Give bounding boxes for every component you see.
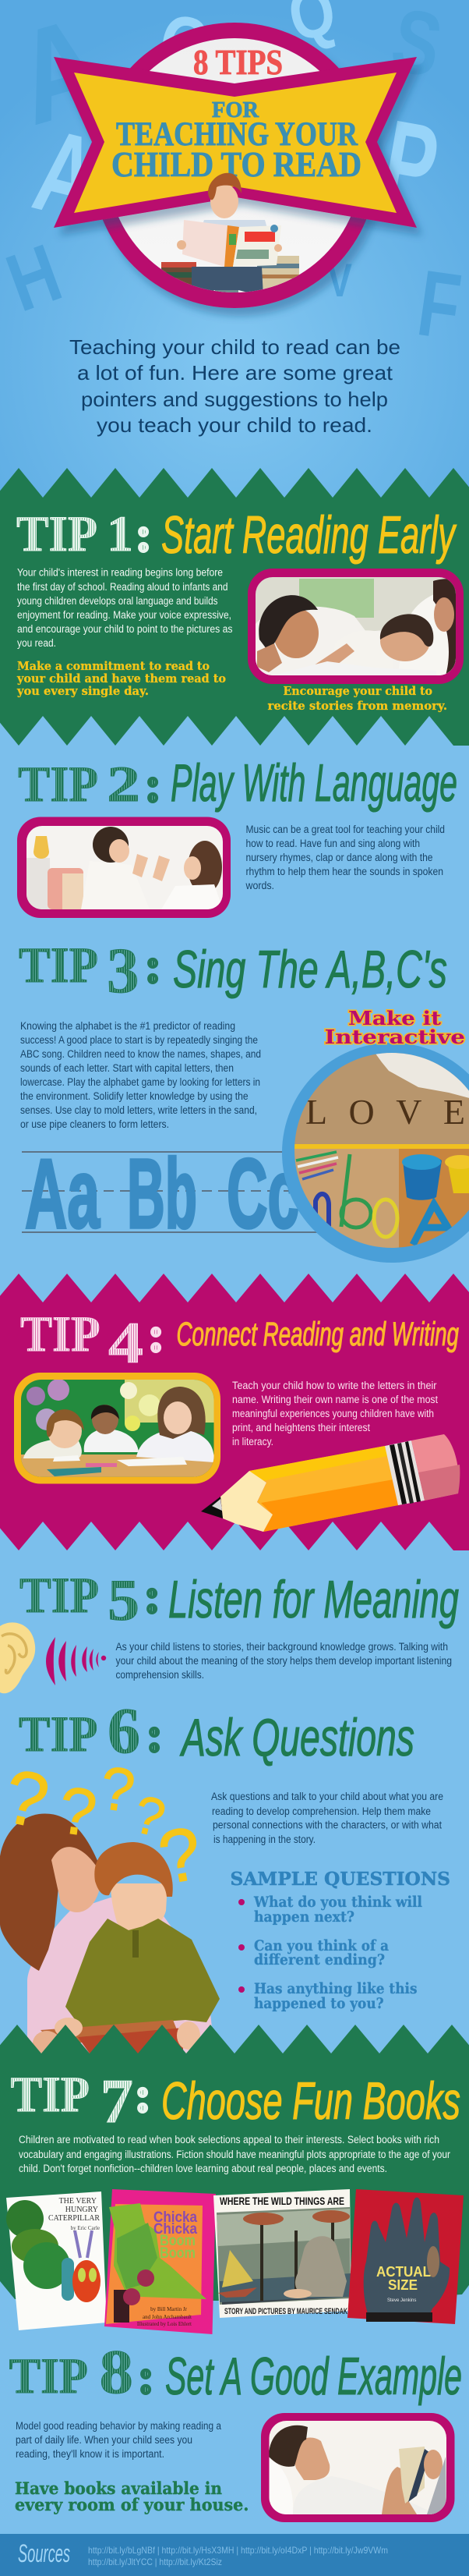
- panel: tip 3: [19, 934, 469, 1263]
- decorative alphabet letters: [0, 0, 467, 360]
- book: the very hungry caterpillar: by Eric Carle: [71, 2225, 100, 2231]
- photo circle: interactive letters: [282, 1043, 469, 1263]
- panel: tip 1: [0, 468, 469, 746]
- book: chicka chicka boom boom: Illustrated by Lois Ehlert: [137, 2321, 192, 2327]
- intro text: Teaching your child to read can be: [69, 335, 400, 359]
- heading: tip 7: :: [135, 2069, 151, 2122]
- heading: tip 6: :: [146, 1709, 163, 1762]
- decorative alphabet letters: V: [327, 254, 352, 306]
- body text: meaningful experiences young children have with: [232, 1408, 434, 1419]
- body text: [232, 1380, 438, 1447]
- body text: senses. Use clay to mold letters, write letters in the sand,: [20, 1104, 257, 1116]
- heading: tip 1: TIP: [16, 506, 97, 562]
- body text: Teach your child how to write the letters in their: [232, 1380, 437, 1391]
- badge ribbon yellow: [74, 73, 397, 213]
- callout: commitment: [16, 659, 226, 698]
- question lines: Has anything like this: [254, 1980, 418, 1997]
- heading: tip 6: 6: [108, 1695, 140, 1767]
- body text: [16, 2420, 221, 2460]
- boy reading on books: [161, 173, 299, 296]
- icon: ear: [0, 1622, 35, 1693]
- heading: tip 5: [19, 1568, 160, 1633]
- heading: tip 6: [19, 1695, 163, 1767]
- body text: lowercase. Play the alphabet game by looking for letters in: [20, 1076, 260, 1088]
- book: the very hungry caterpillar: CATERPILLAR: [48, 2214, 100, 2223]
- book: the very hungry caterpillar: [6, 2192, 107, 2330]
- caption: recite stories: Encourage your child to: [284, 684, 432, 698]
- photo: family reading: [248, 569, 464, 684]
- decorative alphabet letters: A: [23, 104, 108, 244]
- book: chicka chicka boom boom: Boom: [160, 2233, 196, 2249]
- callout: commitment: Make a commitment to read to: [17, 659, 210, 673]
- heading: tip 2: :: [145, 759, 161, 812]
- body text: nursery rhymes, clap or dance along with the: [246, 852, 433, 863]
- body text: you read.: [17, 637, 56, 649]
- heading: tip 8: [9, 2338, 154, 2407]
- photo: mother and boy reading: [0, 1814, 220, 2059]
- book: chicka chicka boom boom: and John Archambault: [143, 2314, 192, 2320]
- callout: books in every room: [15, 2479, 249, 2514]
- body text: child. Don't forget nonfiction--children love learning about real people, places and events.: [19, 2163, 387, 2174]
- panel: tip 8: [9, 2338, 462, 2522]
- callout: books in every room: Have books available in: [15, 2479, 222, 2498]
- body text: Model good reading behavior by making reading a: [16, 2420, 221, 2432]
- source urls: http://bit.ly/bLgNBf | http://bit.ly/HsX3MH | http://bit.ly/oI4DxP | http://bit.ly/Jw9VWm: [88, 2545, 388, 2556]
- intro text: [69, 335, 400, 437]
- body text: sounds of each letter. Start with capital letters, then: [20, 1062, 234, 1074]
- heading: tip 4: [20, 1306, 164, 1376]
- title: for: FOR: [212, 97, 259, 122]
- book: actual size: [347, 2189, 464, 2324]
- heading: tip 3: :: [145, 940, 161, 993]
- magenta zigzag band: [0, 1274, 469, 1550]
- green zigzag band: [0, 468, 469, 746]
- heading: tip 1: 1: [107, 506, 133, 562]
- caption: recite stories: recite stories from memory.: [268, 699, 447, 713]
- heading: tip 2: TIP: [18, 757, 98, 813]
- intro text: pointers and suggestions to help: [81, 388, 388, 411]
- bullets: [238, 1899, 245, 1993]
- heading: tip 8: TIP: [9, 2348, 88, 2404]
- book: where the wild things are: [213, 2189, 351, 2318]
- book: actual size: SIZE: [388, 2277, 418, 2293]
- footer bar: [0, 2534, 469, 2576]
- question lines: What do you think will: [253, 1894, 422, 1911]
- badge inner disc: [108, 38, 361, 292]
- heading: tip 3: [19, 934, 161, 1006]
- photo: man reading in bed: [261, 2413, 455, 2522]
- alphabet letters aa bb cc: [25, 1139, 299, 1249]
- heading: tip 1: [16, 506, 152, 562]
- question lines: Can you think of a: [254, 1937, 389, 1954]
- body text: the environment. Solidify letter knowledge by using the: [20, 1090, 249, 1102]
- heading: tip 4: 4: [108, 1311, 143, 1376]
- body text: or use pipe cleaners to form letters.: [20, 1118, 169, 1130]
- icon: pencil: [201, 1434, 460, 1532]
- book: actual size: ACTUAL: [376, 2264, 431, 2280]
- body text: in literacy.: [232, 1436, 273, 1447]
- body text: [19, 2134, 450, 2174]
- heading: tip 1: :: [136, 508, 152, 562]
- body text: ABC song. Children need to know the names, shapes, and: [20, 1048, 261, 1060]
- body text: is happening in the story.: [213, 1834, 316, 1845]
- header background: [0, 0, 469, 499]
- alphabet letters aa bb cc: Cc: [227, 1139, 299, 1249]
- body text: reading, they'll know it is important.: [16, 2448, 164, 2460]
- photo: mother and daughter clapping: [17, 817, 231, 918]
- heading: tip 8: 8: [100, 2338, 133, 2407]
- icon: question marks: ?: [128, 1784, 171, 1848]
- panel: tip 6: [19, 1695, 450, 2012]
- book: where the wild things are: STORY AND PICTURES BY MAURICE SENDAK: [224, 2307, 347, 2316]
- intro text: a lot of fun. Here are some great: [77, 361, 393, 384]
- body text: [20, 1020, 261, 1130]
- heading: tip 7: 7: [100, 2068, 133, 2136]
- callout: make it interactive: [324, 1007, 465, 1048]
- heading: tip 3: TIP: [19, 937, 98, 994]
- list: sample questions: [238, 1894, 422, 2012]
- caption: recite stories: [268, 684, 447, 713]
- heading: tip 4: TIP: [20, 1306, 100, 1362]
- photo circle: interactive letters: LOVE: [305, 1092, 465, 1132]
- body text: success! A good place to start is by repeatedly singing the: [20, 1034, 258, 1046]
- heading: tip 7: TIP: [11, 2067, 90, 2123]
- body text: enjoyment for reading. Make your voice expressive,: [17, 609, 231, 621]
- heading: tip 5: 5: [108, 1568, 139, 1633]
- question lines: different ending?: [254, 1951, 385, 1968]
- body text: young children develops oral language and builds: [17, 595, 218, 607]
- heading: tip 6: TIP: [19, 1706, 98, 1763]
- icon: question marks: ?: [54, 1773, 101, 1851]
- heading: tip 7: [11, 2067, 151, 2136]
- source urls: [88, 2545, 388, 2567]
- body text: how to read. Have fun and sing along with: [246, 838, 420, 849]
- book: chicka chicka boom boom: Chicka: [153, 2209, 197, 2226]
- body text: words.: [245, 880, 274, 891]
- panel: tip 4: [0, 1274, 469, 1550]
- callout: books in every room: every room of your house.: [15, 2495, 249, 2514]
- title: teaching your: TEACHING YOUR: [116, 116, 358, 153]
- callout: commitment: your child and have them read to: [16, 671, 226, 686]
- body text: part of daily life. When your child sees you: [16, 2434, 192, 2446]
- title badge: [54, 23, 417, 308]
- body text: personal connections with the characters, or with what: [213, 1819, 442, 1831]
- badge ribbon outline: [54, 57, 417, 228]
- book: the very hungry caterpillar: HUNGRY: [65, 2206, 98, 2214]
- green zigzag band: [0, 2025, 469, 2301]
- panel: tip 5: [0, 1568, 459, 1693]
- book: chicka chicka boom boom: by Bill Martin Jr: [150, 2306, 188, 2312]
- footer: sources: [0, 2534, 469, 2576]
- alphabet letters aa bb cc: Bb: [127, 1139, 197, 1249]
- body text: [245, 824, 445, 891]
- heading: tip 8: :: [138, 2351, 154, 2404]
- question lines: happen next?: [254, 1908, 354, 1926]
- book: where the wild things are: WHERE THE WILD THINGS ARE: [220, 2195, 344, 2207]
- icon: sound waves: [46, 1637, 106, 1685]
- body text: and encourage your child to point to the pictures as: [17, 623, 233, 635]
- heading: tip 3: 3: [107, 934, 139, 1006]
- callout: make it interactive: Make it: [348, 1007, 441, 1029]
- book: chicka chicka boom boom: Boom: [160, 2245, 196, 2262]
- intro text: you teach your child to read.: [97, 413, 372, 437]
- book: chicka chicka boom boom: Chicka: [153, 2221, 197, 2238]
- icon: question marks: ?: [153, 1811, 208, 1901]
- body text: Knowing the alphabet is the #1 predictor of reading: [20, 1020, 235, 1032]
- question lines: [253, 1894, 422, 2012]
- book: actual size: Steve Jenkins: [387, 2298, 416, 2303]
- body text: print, and heightens their interest: [232, 1422, 370, 1433]
- body text: reading to develop comprehension. Help them make: [212, 1805, 431, 1817]
- photo: children writing: [14, 1373, 220, 1483]
- panel: tip 2: [17, 753, 457, 918]
- body text: the first day of school. Reading aloud to infants and: [17, 581, 227, 593]
- book: the very hungry caterpillar: THE VERY: [59, 2197, 97, 2206]
- body text: rhythm to help them hear the sounds in spoken: [246, 866, 443, 877]
- source urls: http://bit.ly/JltYCC | http://bit.ly/Kt2Siz: [88, 2557, 222, 2567]
- callout: make it interactive: Interactive: [324, 1026, 465, 1048]
- body text: Your child's interest in reading begins long before: [17, 566, 223, 579]
- title: child to read: CHILD TO READ: [111, 144, 361, 184]
- body text: [115, 1641, 452, 1681]
- badge circle: [92, 23, 377, 308]
- body text: Music can be a great tool for teaching your child: [246, 824, 445, 835]
- alphabet letters aa bb cc: Aa: [25, 1139, 100, 1249]
- body text: comprehension skills.: [115, 1669, 204, 1681]
- body text: [17, 566, 233, 649]
- icon: question marks: [0, 1752, 208, 1901]
- icon: question marks: ?: [96, 1752, 139, 1826]
- heading: tip 4: :: [148, 1309, 164, 1362]
- question lines: happened to you?: [254, 1995, 383, 2012]
- decorative alphabet letters: C: [153, 0, 214, 91]
- body text: name. Writing their own name is one of the most: [232, 1394, 438, 1405]
- handwriting guide lines: [22, 1152, 319, 1232]
- panel: tip 7: [0, 2025, 469, 2334]
- heading: tip 5: TIP: [19, 1568, 99, 1624]
- heading: tip 2: [18, 757, 161, 813]
- heading: sample questions: SAMPLE QUESTIONS: [231, 1869, 450, 1890]
- title: 8 tips: 8 TIPS: [193, 42, 283, 82]
- body text: Ask questions and talk to your child about what you are: [211, 1791, 443, 1802]
- callout: commitment: you every single day.: [16, 684, 149, 698]
- book: chicka chicka boom boom: [104, 2189, 216, 2334]
- heading: tip 5: :: [144, 1570, 160, 1623]
- heading: tip 2: 2: [107, 757, 140, 813]
- sources label: Sources: [18, 2539, 70, 2567]
- body text: [211, 1791, 443, 1845]
